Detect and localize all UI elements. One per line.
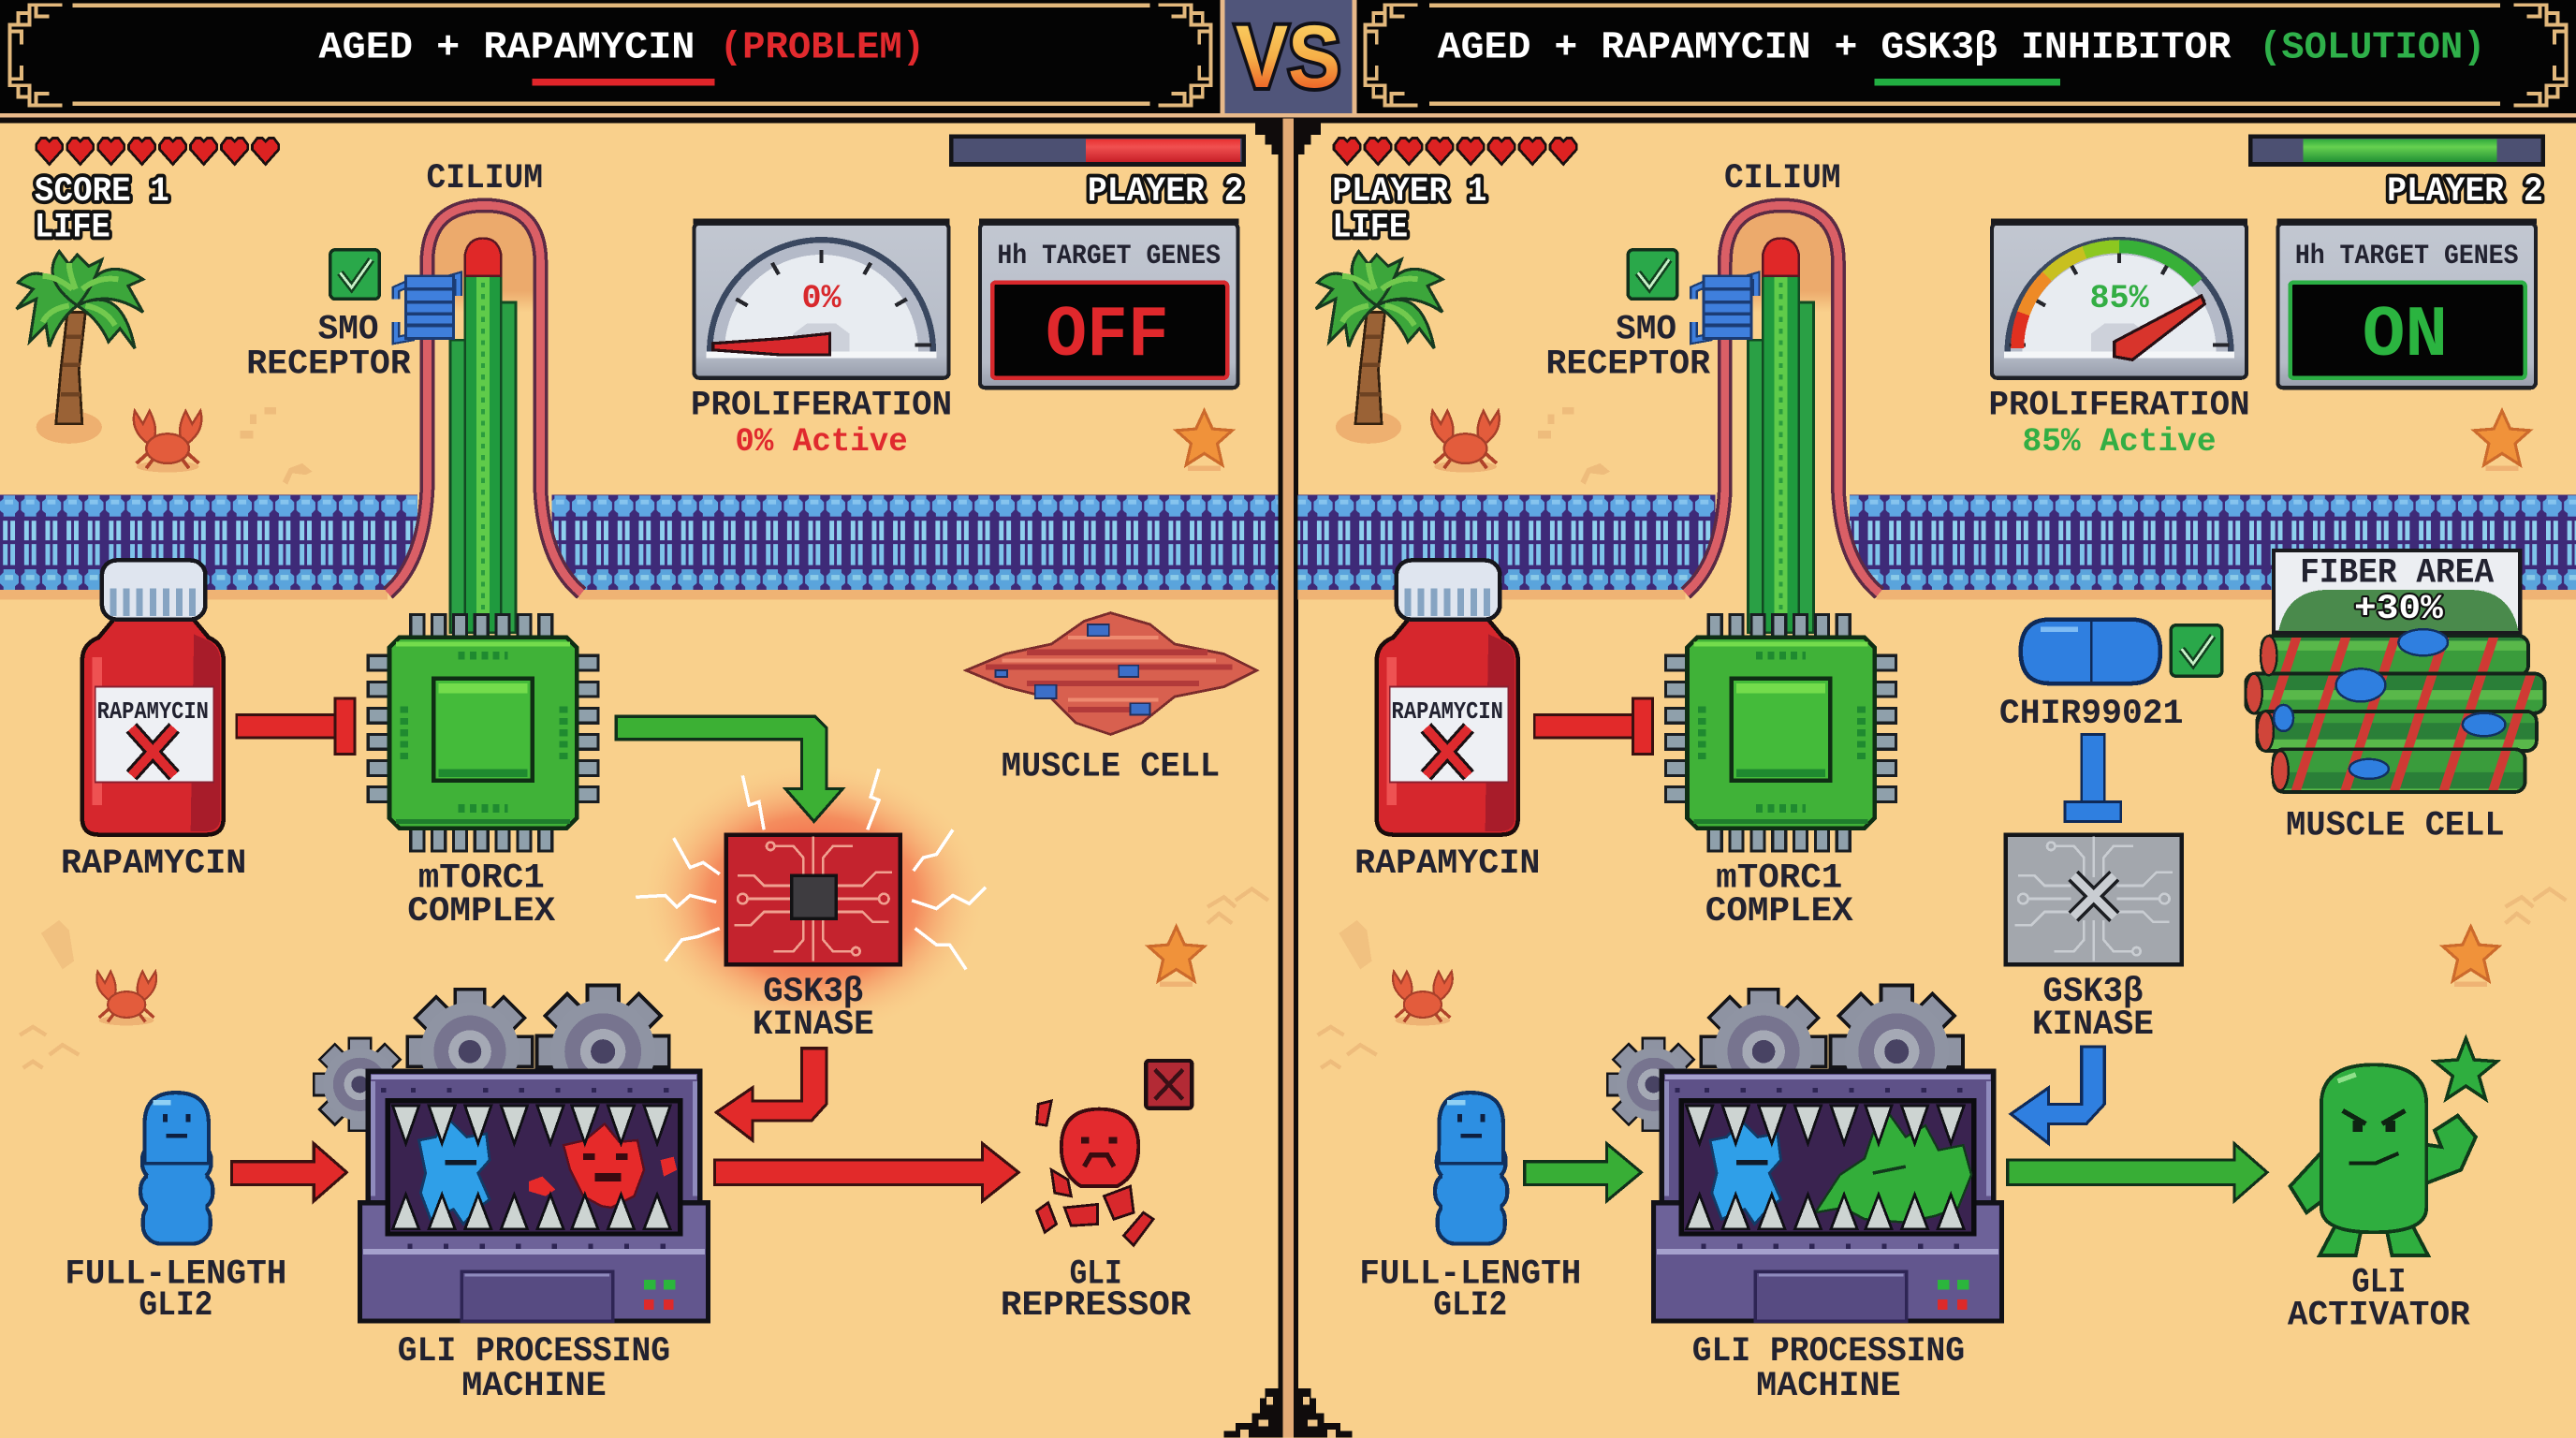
left hud: hearts, score, life: SCORE 1 — [35, 172, 169, 212]
proliferation gauge left: PROLIFERATION — [691, 386, 952, 425]
blue inhibition bar — [2065, 734, 2121, 822]
left hud: player 2 health bar — [951, 137, 1244, 212]
starfish left lower — [1149, 927, 1204, 984]
palm tree right — [1316, 252, 1442, 444]
muscle cell grown with fiber area badge: FIBER AREA — [2300, 553, 2495, 593]
vs badge: VS — [1236, 7, 1340, 107]
mtorc1 chip right: COMPLEX — [1705, 892, 1854, 932]
starfish right top — [2474, 411, 2530, 468]
full-length gli2 left: GLI2 — [139, 1286, 212, 1326]
hh target genes off: Hh TARGET GENES — [997, 240, 1221, 271]
full-length gli2 left: FULL-LENGTH — [65, 1255, 286, 1295]
rapamycin bottle right — [1354, 560, 1540, 884]
proliferation gauge left: 0% — [802, 280, 842, 317]
muscle cell grown with fiber area badge — [2246, 550, 2545, 846]
full-length gli2 left — [65, 1093, 286, 1326]
header panel: aged + rapamycin + gsk3b inhibitor (solution) — [1357, 0, 2576, 113]
red arrow machine to repressor — [714, 1143, 1018, 1201]
gsk3b kinase active: KINASE — [753, 1005, 874, 1045]
gli activator character — [2288, 1038, 2497, 1336]
hh target genes on: Hh TARGET GENES — [2295, 240, 2519, 271]
rapamycin bottle left — [61, 560, 246, 884]
gsk3b kinase active — [636, 761, 988, 1045]
right hud: hearts, player 1, life: PLAYER 1 — [1332, 172, 1486, 212]
small crab right — [1393, 972, 1453, 1025]
muscle cell grown with fiber area badge: +30% — [2354, 590, 2444, 629]
left hud: hearts, score, life: LIFE — [35, 209, 110, 248]
right hud: player 2 health bar: PLAYER 2 — [2387, 172, 2543, 212]
gli activator character: ACTIVATOR — [2288, 1297, 2471, 1336]
rapamycin bottle left: RAPAMYCIN — [61, 844, 246, 884]
gsk3b kinase inhibited — [2006, 835, 2182, 1045]
cilium right: CILIUM — [1724, 159, 1841, 198]
rapamycin bottle right: RAPAMYCIN — [1354, 844, 1540, 884]
small crab left — [96, 972, 156, 1025]
proliferation gauge left — [691, 218, 952, 461]
right hud: hearts, player 1, life — [1332, 138, 1576, 248]
gli processing machine left — [314, 986, 708, 1406]
proliferation gauge right: 85% — [2089, 280, 2150, 317]
gli processing machine right — [1607, 986, 2002, 1406]
hh target genes off — [979, 218, 1238, 388]
muscle cell grown with fiber area badge: MUSCLE CELL — [2286, 807, 2505, 846]
smo receptor left — [246, 250, 459, 384]
cilium left: CILIUM — [426, 159, 543, 198]
chir99021 capsule: CHIR99021 — [1999, 695, 2183, 734]
header panel: aged + rapamycin (problem): (PROBLEM) — [720, 26, 925, 69]
red bent arrow gsk3b to machine — [716, 1049, 827, 1140]
crab right top — [1431, 411, 1500, 473]
rapamycin bottle left: RAPAMYCIN — [97, 697, 209, 726]
smo receptor right: SMO — [1616, 311, 1676, 350]
mtorc1 chip left: mTORC1 — [418, 859, 545, 899]
header panel: aged + rapamycin + gsk3b inhibitor (solution): AGED + RAPAMYCIN + GSK3β INHIBITOR — [1438, 26, 2232, 69]
mtorc1 chip left: COMPLEX — [407, 892, 556, 932]
gli repressor broken: REPRESSOR — [1001, 1286, 1192, 1326]
full-length gli2 right: FULL-LENGTH — [1359, 1255, 1581, 1295]
gsk3b kinase inhibited: GSK3β — [2042, 973, 2143, 1012]
right hud: player 2 health bar — [2250, 137, 2543, 212]
hh target genes off: OFF — [1046, 296, 1169, 377]
proliferation gauge right: PROLIFERATION — [1989, 386, 2250, 425]
gli processing machine left: GLI PROCESSING — [398, 1332, 670, 1372]
left hud: hearts, score, life — [35, 138, 279, 248]
smo receptor left: RECEPTOR — [246, 345, 412, 384]
cilium left — [388, 159, 581, 633]
smo receptor right: RECEPTOR — [1546, 345, 1711, 384]
mtorc1 chip right: mTORC1 — [1716, 859, 1842, 899]
mtorc1 chip right — [1666, 614, 1895, 932]
full-length gli2 right: GLI2 — [1433, 1286, 1507, 1326]
hh target genes on — [2277, 218, 2537, 388]
palm tree left — [17, 252, 143, 444]
header panel: aged + rapamycin (problem): AGED + RAPAMYCIN — [319, 26, 695, 69]
sand specks right — [1318, 407, 2566, 1068]
gli processing machine left: MACHINE — [461, 1367, 607, 1406]
proliferation gauge left: 0% Active — [735, 423, 908, 461]
gli processing machine right: GLI PROCESSING — [1692, 1332, 1965, 1372]
blue bent arrow gsk3b to machine — [2011, 1047, 2104, 1143]
green arrow to gsk3b — [616, 716, 842, 822]
crab left top — [134, 411, 201, 473]
gli repressor broken — [1001, 1061, 1192, 1326]
gsk3b kinase active: GSK3β — [763, 973, 863, 1012]
hh target genes on: ON — [2363, 296, 2448, 377]
cell membrane left — [0, 494, 1278, 600]
gli processing machine right: MACHINE — [1756, 1367, 1901, 1406]
gli activator character: GLI — [2351, 1263, 2406, 1302]
cell membrane right — [1298, 494, 2576, 600]
proliferation gauge right — [1989, 218, 2250, 461]
gsk3b kinase inhibited: KINASE — [2032, 1005, 2154, 1045]
header panel: aged + rapamycin + gsk3b inhibitor (solution): (SOLUTION) — [2259, 26, 2485, 69]
starfish right lower — [2443, 927, 2498, 984]
inhibition arrow rapamycin to mtorc1 left — [237, 698, 355, 755]
muscle cell atrophied: MUSCLE CELL — [1002, 747, 1220, 786]
gli repressor broken: GLI — [1070, 1255, 1122, 1295]
right hud: hearts, player 1, life: LIFE — [1332, 209, 1408, 248]
smo receptor left: SMO — [318, 311, 379, 350]
muscle cell atrophied — [966, 613, 1257, 786]
green arrow gli2 to machine — [1525, 1143, 1641, 1201]
inhibition arrow rapamycin to mtorc1 right — [1534, 698, 1653, 755]
chir99021 capsule — [1999, 620, 2222, 734]
left hud: player 2 health bar: PLAYER 2 — [1088, 172, 1244, 212]
rapamycin bottle right: RAPAMYCIN — [1392, 697, 1503, 726]
smo receptor right — [1546, 250, 1756, 384]
red arrow gli2 to machine — [232, 1143, 346, 1201]
starfish left top — [1177, 411, 1232, 468]
mtorc1 chip left — [368, 614, 598, 932]
cilium right — [1686, 159, 1880, 633]
full-length gli2 right — [1359, 1093, 1581, 1326]
proliferation gauge right: 85% Active — [2022, 423, 2217, 461]
green arrow machine to activator — [2008, 1143, 2267, 1201]
header panel: aged + rapamycin (problem) — [0, 0, 1222, 113]
sand specks left — [20, 407, 1268, 1068]
